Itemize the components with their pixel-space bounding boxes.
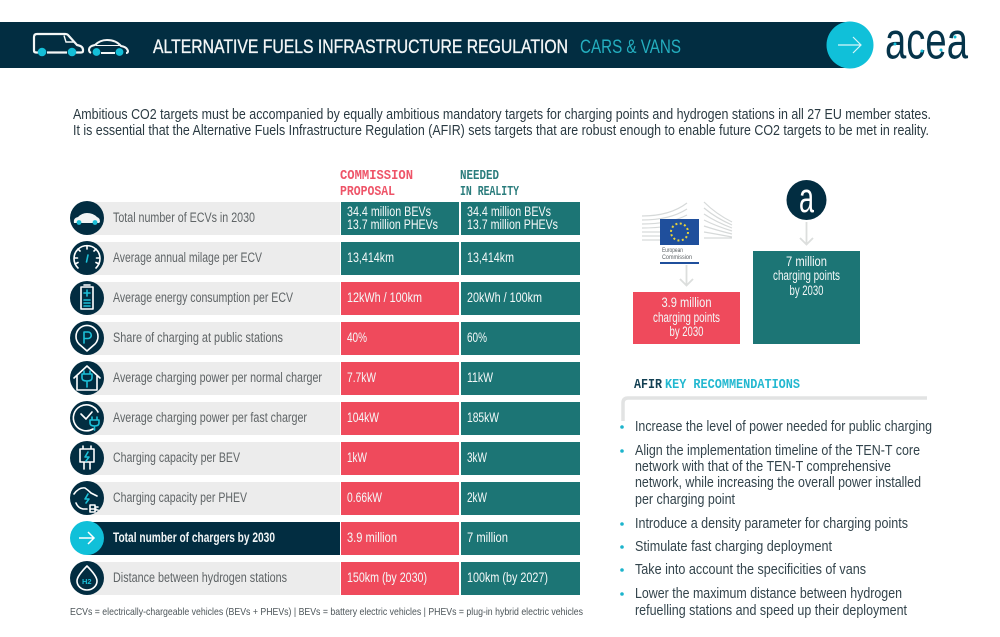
column heading: needed in reality xyxy=(460,168,519,200)
logo: acea symbol: a xyxy=(799,174,814,221)
row: hydrogen stations: Distance between hydrogen stations xyxy=(113,570,287,585)
box: 7 million: charging points xyxy=(773,268,840,283)
column heading: needed in reality: IN REALITY xyxy=(460,184,519,200)
row: fast charger: Average charging power per fast charger xyxy=(113,410,307,425)
box: 3.9 million: 3.9 million xyxy=(662,295,712,310)
row: total ECVs: 13.7 million PHEVs xyxy=(467,217,558,232)
row: normal charger xyxy=(70,361,580,395)
row: hydrogen stations xyxy=(70,561,580,595)
row: capacity per PHEV xyxy=(70,481,580,515)
row: capacity per PHEV: 2kW xyxy=(467,490,487,505)
row: energy consumption xyxy=(70,281,580,315)
icon: clock plug xyxy=(73,405,99,431)
logo: acea symbol xyxy=(786,174,826,221)
row: capacity per BEV: Charging capacity per BEV xyxy=(113,450,240,465)
icon: parking pin xyxy=(76,325,98,351)
key recommendations list: Align the implementation timeline of the TEN-T core xyxy=(635,443,920,459)
row: total ECVs: 34.4 million BEVs xyxy=(467,204,551,219)
key recommendations list: network, while increasing the overall power installed xyxy=(635,475,921,491)
row: capacity per PHEV: Charging capacity per PHEV xyxy=(113,490,247,505)
logo: acea: acea xyxy=(885,12,968,70)
icon: arrow xyxy=(79,532,94,544)
row: normal charger: Average charging power per normal charger xyxy=(113,370,322,385)
row: total chargers: Total number of chargers by 2030 xyxy=(113,530,275,545)
heading: AFIR key recommendations: AFIR xyxy=(634,377,662,393)
footnote: ECVs = electrically-chargeable vehicles (BEVs + PHEVs) | BEVs = battery electric vehicles | PHEVs = plug-in hybrid electric vehicles xyxy=(70,606,583,618)
logo: European Commission xyxy=(642,202,732,264)
row: capacity per PHEV: 0.66kW xyxy=(347,490,382,505)
key recommendations list: Increase the level of power needed for public charging xyxy=(635,419,932,435)
row: total ECVs xyxy=(70,201,580,235)
icon: car xyxy=(74,213,100,225)
box: 7 million: 7 million xyxy=(786,254,827,269)
box: 3.9 million: charging points xyxy=(653,310,720,325)
icon: battery xyxy=(81,285,93,309)
row: total chargers: 7 million xyxy=(467,530,508,545)
row: total ECVs: 13.7 million PHEVs xyxy=(347,217,438,232)
row: energy consumption: Average energy consumption per ECV xyxy=(113,290,293,305)
title: ALTERNATIVE FUELS INFRASTRUCTURE REGULATION xyxy=(153,36,568,58)
box: 7 million xyxy=(753,251,860,344)
row: capacity per BEV: 1kW xyxy=(347,450,367,465)
icon: arrow circle xyxy=(826,22,874,68)
row: annual milage: Average annual milage per ECV xyxy=(113,250,262,265)
row: energy consumption: 12kWh / 100km xyxy=(347,290,422,305)
row: hydrogen stations: 150km (by 2030) xyxy=(347,570,427,585)
column heading: needed in reality: NEEDED xyxy=(460,168,499,184)
row: capacity per BEV xyxy=(70,441,580,475)
heading: AFIR key recommendations: KEY RECOMMENDATIONS xyxy=(665,377,800,393)
row: fast charger: 185kW xyxy=(467,410,499,425)
key recommendations list xyxy=(620,419,932,619)
column heading: commission proposal: PROPOSAL xyxy=(340,184,395,200)
row: normal charger: 11kW xyxy=(467,370,493,385)
arrow: acea to teal box xyxy=(800,222,813,244)
key recommendations list: per charging point xyxy=(635,492,735,508)
box: 3.9 million xyxy=(633,292,740,344)
key recommendations list: Introduce a density parameter for charging points xyxy=(635,516,908,532)
row: annual milage: 13,414km xyxy=(347,250,394,265)
row: normal charger: 7.7kW xyxy=(347,370,376,385)
key recommendations list: network with that of the TEN-T comprehensive xyxy=(635,459,891,475)
box: 3.9 million: by 2030 xyxy=(670,324,704,339)
icon: plug xyxy=(80,446,94,469)
row: total ECVs: 34.4 million BEVs xyxy=(347,204,431,219)
row: fast charger xyxy=(70,401,580,435)
header band xyxy=(0,22,850,68)
row: total chargers: 3.9 million xyxy=(347,530,397,545)
row: public stations: Share of charging at public stations xyxy=(113,330,283,345)
row: public stations: 60% xyxy=(467,330,487,345)
row: annual milage: 13,414km xyxy=(467,250,514,265)
subtitle: CARS & VANS xyxy=(580,36,681,58)
column heading: commission proposal: COMMISSION xyxy=(340,168,413,184)
icon: hybrid plug xyxy=(74,488,98,512)
row: total chargers xyxy=(70,521,580,555)
icon: van xyxy=(34,34,83,56)
row: public stations xyxy=(70,321,580,355)
icon: hydrogen drop: H2 xyxy=(82,577,92,586)
key recommendations list: Stimulate fast charging deployment xyxy=(635,539,832,555)
row: annual milage xyxy=(70,241,580,275)
logo: European Commission: Commission xyxy=(662,254,692,261)
row: total ECVs: Total number of ECVs in 2030 xyxy=(113,210,255,225)
row: public stations: 40% xyxy=(347,330,367,345)
key recommendations list: Lower the maximum distance between hydrogen xyxy=(635,586,902,602)
arrow: commission to red box xyxy=(680,265,693,286)
column heading: commission proposal xyxy=(340,168,413,200)
box: 7 million: by 2030 xyxy=(790,283,824,298)
row: hydrogen stations: 100km (by 2027) xyxy=(467,570,548,585)
logo: European Commission: European xyxy=(662,247,683,254)
intro text xyxy=(73,107,931,139)
key recommendations list: Take into account the specificities of vans xyxy=(635,562,866,578)
icon: hydrogen drop xyxy=(77,566,97,590)
row: fast charger: 104kW xyxy=(347,410,379,425)
icon: house plug xyxy=(74,366,100,390)
icon: gauge xyxy=(74,246,100,268)
row: capacity per BEV: 3kW xyxy=(467,450,487,465)
row: energy consumption: 20kWh / 100km xyxy=(467,290,542,305)
key recommendations list: refuelling stations and speed up their deployment xyxy=(635,603,907,619)
icon: car xyxy=(89,40,128,56)
